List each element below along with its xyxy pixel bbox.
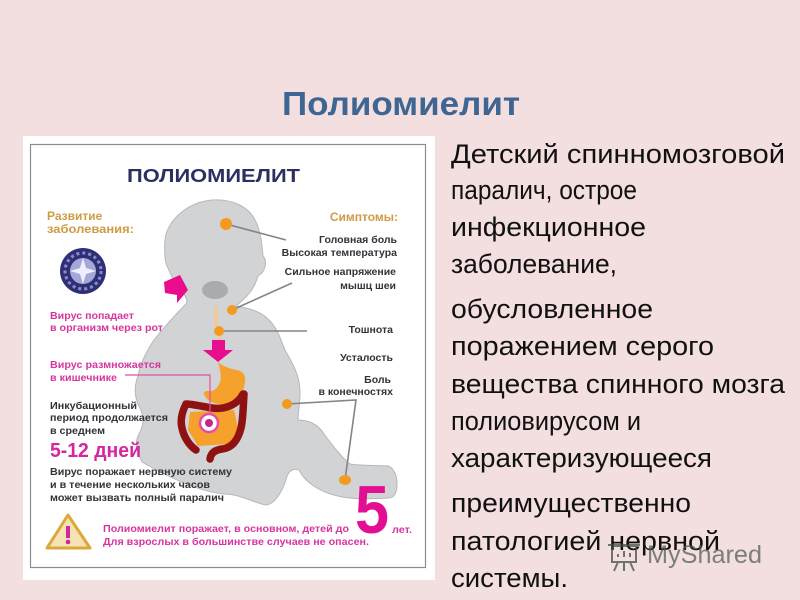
text: years: лет. <box>392 524 412 536</box>
text: incubation: Инкубационный <box>50 400 137 412</box>
body text <box>451 139 786 593</box>
stomach <box>204 362 245 404</box>
infographic heading: ПОЛИОМИЕЛИТ <box>127 166 300 186</box>
panel: infographic image <box>23 136 435 580</box>
body text: вещества спинного мозга <box>451 369 786 399</box>
panel: infographic image: и в течение нескольких часов <box>50 479 211 491</box>
heading: disease development: Развитие <box>47 209 103 223</box>
panel: infographic image: период продолжается <box>50 412 168 424</box>
body text: полиовирусом и <box>451 406 641 436</box>
text: nausea: Тошнота <box>349 324 393 336</box>
panel: infographic image: Для взрослых в большинстве случаев не опасен. <box>103 536 369 548</box>
text: neck symptoms: Сильное напряжение <box>285 266 396 278</box>
symptom leader lines <box>219 224 356 480</box>
icon: watermark presentation board <box>608 545 640 571</box>
large intestine <box>181 394 244 459</box>
icon: warning triangle <box>47 515 90 548</box>
title: Полиомиелит <box>282 85 520 122</box>
text: limb pain: Боль <box>364 374 392 386</box>
panel: infographic image: мышц шеи <box>340 280 396 292</box>
esophagus <box>216 306 220 350</box>
panel: infographic image: заболевания: <box>47 222 134 236</box>
body text: заболевание, <box>451 249 617 279</box>
body text: инфекционное <box>451 212 646 242</box>
watermark <box>608 541 762 571</box>
warning text: Полиомиелит поражает, в основном, детей до <box>103 523 349 535</box>
panel: infographic image: в кишечнике <box>50 372 117 384</box>
panel: infographic image: Высокая температура <box>282 247 397 259</box>
body text: преимущественно <box>451 488 691 518</box>
target marker <box>200 414 218 432</box>
body text: патологией нервной <box>451 526 720 556</box>
panel: infographic image: в конечностях <box>319 386 393 398</box>
text: virus multiplies: Вирус размножается <box>50 359 161 371</box>
text: head symptoms: Головная боль <box>319 234 398 246</box>
panel: infographic image: в среднем <box>50 425 105 437</box>
watermark text: MyShared <box>647 541 762 569</box>
arrow: virus enters mouth <box>164 275 188 303</box>
text: nervous system: Вирус поражает нервную систему <box>50 466 232 478</box>
panel: infographic image: в организм через рот <box>50 322 163 334</box>
heading: symptoms: Симптомы: <box>330 210 398 224</box>
child silhouette <box>135 200 397 505</box>
text: fatigue: Усталость <box>340 352 394 364</box>
mouth <box>202 281 228 299</box>
arrow: virus moves down <box>203 340 233 362</box>
text: virus enters: Вирус попадает <box>50 310 134 322</box>
icon: virus <box>60 248 106 294</box>
body text: характеризующееся <box>451 443 712 473</box>
body text: поражением серого <box>451 331 714 361</box>
body text: системы. <box>451 563 568 593</box>
number: incubation days: 5-12 дней <box>50 440 141 462</box>
body text: Детский спинномозговой <box>451 139 785 169</box>
body text: обусловленное <box>451 294 653 324</box>
small intestine <box>188 410 238 446</box>
body text: паралич, острое <box>451 175 637 205</box>
symptom markers <box>214 218 351 485</box>
number: five: 5 <box>355 472 389 548</box>
pink leader line <box>125 375 210 415</box>
panel: infographic image: может вызвать полный паралич <box>50 492 224 504</box>
